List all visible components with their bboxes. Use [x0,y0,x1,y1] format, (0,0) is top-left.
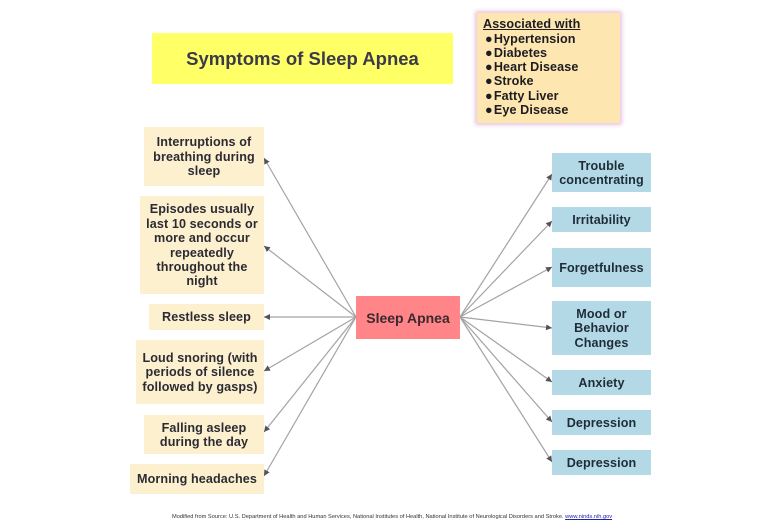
effect: depression: Depression [567,416,636,430]
effect: depression: Depression [567,456,636,470]
callout: associated with: ● Diabetes [485,46,547,60]
callout: associated with: Associated with [483,17,580,31]
effect: irritability [552,207,651,232]
effect: trouble concentrating [552,153,651,192]
symptom: loud snoring [136,340,264,404]
center node: Sleep Apnea: Sleep Apnea [366,310,450,326]
effect: depression [552,410,651,435]
symptom: interruptions of breathing: Interruptions of [157,135,251,149]
effect: mood or behavior changes: Behavior [574,321,629,335]
symptom: morning headaches [130,464,264,494]
effect: anxiety [552,370,651,395]
effect: mood or behavior changes: Mood or [576,307,627,321]
callout: associated with: ● Heart Disease [485,60,578,74]
symptom: episodes: throughout the [157,260,247,274]
title: Symptoms of Sleep Apnea [186,48,419,69]
symptom: interruptions of breathing: breathing during [153,150,255,164]
symptom: episodes: Episodes usually [150,202,254,216]
title [152,33,453,84]
effect: irritability: Irritability [572,213,631,227]
effect: depression [552,450,651,475]
symptom: episodes: repeatedly [170,246,234,260]
symptom: falling asleep: Falling asleep [162,421,246,435]
symptom: interruptions of breathing [144,127,264,186]
effect: mood or behavior changes: Changes [575,336,628,350]
effect: mood or behavior changes [552,301,651,355]
symptom: loud snoring: periods of silence [146,365,254,379]
symptom: loud snoring: Loud snoring (with [142,351,258,365]
symptom: episodes: last 10 seconds or [146,217,258,231]
effect: anxiety: Anxiety [578,376,625,390]
callout: associated with [477,13,620,123]
callout: associated with: ● Stroke [485,74,534,88]
center node: Sleep Apnea [356,296,460,339]
symptom: restless sleep [149,304,264,330]
symptom: loud snoring: followed by gasps) [142,380,258,394]
callout: associated with: ● Fatty Liver [485,89,559,103]
callout: associated with: ● Hypertension [485,32,576,46]
effect: forgetfulness: Forgetfulness [559,261,644,275]
effect: trouble concentrating: Trouble [578,159,625,173]
source footnote: Modified from Source: U.S. Department of Health and Human Services, National Institutes of Health, National Institute of Neurological Disorders and Stroke. www.ninds.nih.gov [172,514,612,520]
symptom: restless sleep: Restless sleep [162,310,251,324]
symptom: falling asleep: during the day [160,435,248,449]
symptom: episodes: night [186,274,218,288]
effect: trouble concentrating: concentrating [559,173,644,187]
symptom: falling asleep [144,415,264,454]
effect: forgetfulness [552,248,651,287]
symptom: morning headaches: Morning headaches [137,472,257,486]
symptom: episodes [140,196,264,294]
symptom: interruptions of breathing: sleep [188,164,220,178]
symptom: episodes: more and occur [154,231,250,245]
callout: associated with: ● Eye Disease [485,103,568,117]
